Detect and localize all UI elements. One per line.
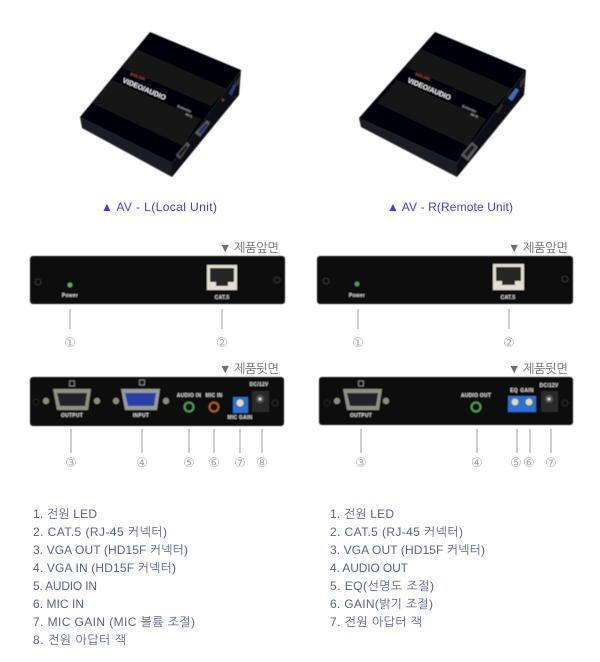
panel: local unit back	[30, 377, 284, 426]
text block: local unit parts list	[33, 507, 195, 647]
panel: local unit back: OUTPUT	[61, 413, 83, 419]
panel: local unit back: AUDIO IN	[177, 393, 201, 399]
callout lines: local back	[65, 429, 268, 471]
product photo: local unit: BIZLINK	[130, 71, 146, 82]
callout lines: remote back: ④	[471, 456, 483, 471]
product photo: local unit: Extender	[177, 104, 193, 114]
callout lines: remote back: ⑦	[545, 456, 557, 471]
text block: remote unit parts list: 7. 전원 아답터 잭	[330, 615, 422, 629]
panel: local unit back: INPUT	[133, 413, 149, 419]
caption: local unit: ▲ AV - L(Local Unit)	[101, 200, 217, 214]
text block: remote unit parts list: 5. EQ(선명도 조절)	[330, 579, 434, 593]
callout lines: remote back	[355, 429, 557, 471]
product photo: remote unit: Extender	[462, 104, 478, 114]
text block: local unit parts list: 5. AUDIO IN	[33, 579, 97, 593]
callout lines: local front: ②	[216, 336, 228, 351]
panel: remote unit front: CAT.5	[501, 295, 515, 301]
product photo: remote unit: AV-R	[470, 112, 479, 119]
text block: local unit parts list: 4. VGA IN (HD15F 커넥터)	[33, 561, 176, 575]
panel: remote unit back: GAIN	[520, 388, 534, 394]
text block: remote unit parts list: 3. VGA OUT (HD15F 커넥터)	[330, 543, 485, 557]
text block: local unit parts list: 3. VGA OUT (HD15F 커넥터)	[33, 543, 188, 557]
text block: local unit parts list: 7. MIC GAIN (MIC 볼륨 조절)	[33, 615, 195, 629]
callout lines: remote front	[352, 309, 515, 351]
text block: remote unit parts list: 6. GAIN(밝기 조절)	[330, 597, 433, 611]
product photo: local unit: AV-L	[185, 112, 194, 119]
panel: local unit front	[30, 256, 285, 304]
callout lines: local back: ③	[65, 456, 77, 471]
text block: remote unit parts list: 1. 전원 LED	[330, 507, 394, 521]
panel: remote unit front: Power	[349, 293, 365, 299]
callout lines: remote back: ⑥	[523, 456, 535, 471]
callout lines: remote front: ①	[352, 336, 364, 351]
text block: remote unit parts list	[330, 507, 485, 629]
panel: local unit front: CAT.5	[215, 295, 229, 301]
heading: front left: ▼ 제품앞면	[219, 241, 279, 255]
panel: remote unit back: AUDIO OUT	[461, 393, 491, 399]
callout lines: local back: ④	[136, 456, 148, 471]
product photo: remote unit: BIZLINK	[415, 71, 431, 82]
callout lines: local back: ⑦	[234, 456, 246, 471]
text block: remote unit parts list: 4. AUDIO OUT	[330, 561, 409, 575]
heading: back right: ▼ 제품뒷면	[508, 362, 568, 376]
product photo: remote unit: VIDEO/AUDIO	[406, 77, 452, 102]
product photo: local unit: VIDEO/AUDIO	[121, 77, 167, 102]
heading: back left: ▼ 제품뒷면	[219, 362, 279, 376]
text block: local unit parts list: 6. MIC IN	[33, 597, 84, 611]
text block: local unit parts list: 2. CAT.5 (RJ-45 커넥터)	[33, 525, 167, 539]
panel: remote unit back: OUTPUT	[350, 413, 372, 419]
callout lines: local back: ⑥	[208, 456, 220, 471]
heading: front right: ▼ 제품앞면	[508, 241, 568, 255]
panel: local unit back: MIC GAIN	[227, 415, 253, 421]
panel: remote unit back: EQ	[510, 388, 518, 394]
text block: remote unit parts list: 2. CAT.5 (RJ-45 커넥터)	[330, 525, 463, 539]
panel: local unit back: MIC IN	[205, 393, 223, 399]
callout lines: remote front: ②	[503, 336, 515, 351]
callout lines: remote back: ③	[355, 456, 367, 471]
panel: remote unit back	[319, 377, 573, 425]
callout lines: local back: ⑧	[256, 456, 268, 471]
callout lines: local back: ⑤	[183, 456, 195, 471]
caption: remote unit: ▲ AV - R(Remote Unit)	[387, 200, 513, 214]
panel: remote unit front	[317, 256, 573, 304]
callout lines: local front	[64, 309, 228, 351]
text block: local unit parts list: 8. 전원 아답터 잭	[33, 633, 126, 647]
panel: local unit back: DC/12V	[249, 382, 269, 388]
callout lines: local front: ①	[64, 336, 76, 351]
panel: remote unit back: DC/12V	[539, 383, 559, 389]
text block: local unit parts list: 1. 전원 LED	[33, 507, 97, 521]
product photo: local unit	[80, 32, 241, 177]
panel: local unit front: Power	[62, 293, 78, 299]
callout lines: remote back: ⑤	[510, 456, 522, 471]
product photo: remote unit	[359, 32, 526, 177]
